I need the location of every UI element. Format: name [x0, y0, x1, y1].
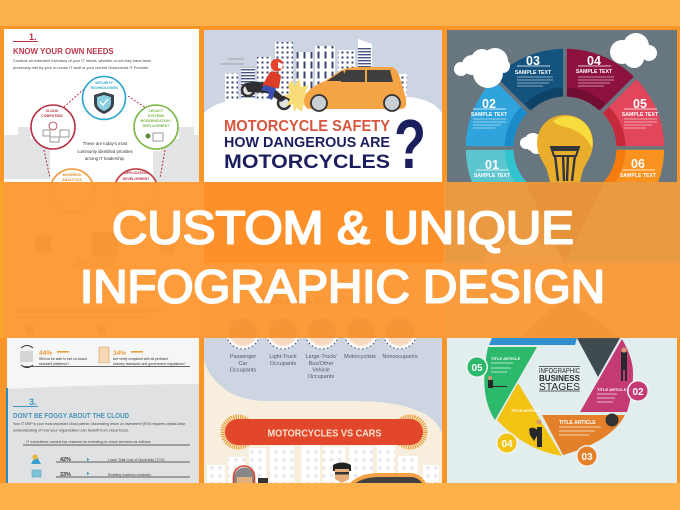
question mark: ?	[394, 105, 426, 183]
stat: 44 percent: stranded platforms?	[39, 362, 69, 366]
driver and car	[333, 462, 426, 483]
body text: understanding of how your organization can benefit from cloud focus.	[13, 428, 129, 432]
segment: pink	[580, 339, 633, 412]
panel: motorcycles vs cars	[204, 338, 442, 483]
intro text	[13, 60, 151, 70]
segment: yellow	[497, 383, 562, 456]
node: legacy systems	[134, 105, 178, 149]
stat: 34 percent: Are verify compliant with all pertinent	[113, 357, 168, 361]
row: 33 percent: Enabling business continuity	[108, 473, 151, 477]
segment labels: 01	[485, 158, 499, 172]
crash burst	[284, 78, 309, 112]
segment 05	[600, 77, 666, 148]
center text: These are today's most	[83, 141, 128, 146]
center text: among IT leadership.	[85, 156, 125, 161]
segment labels: SAMPLE TEXT	[515, 70, 552, 76]
segment labels: SAMPLE TEXT	[474, 173, 511, 179]
title: STAGES	[539, 381, 580, 393]
title text: MOTORCYCLE SAFETY	[224, 118, 390, 135]
segment 01	[466, 150, 515, 182]
panel: six step lightbulb	[447, 30, 677, 182]
title text: MOTORCYCLES	[224, 152, 390, 173]
center text: commonly identified priorities	[77, 149, 133, 154]
light bulb	[537, 115, 593, 182]
segment labels: SAMPLE TEXT	[576, 69, 613, 75]
stat: 34 percent: industry standards and government regulations?	[113, 362, 186, 366]
segment: green	[484, 347, 537, 420]
badge 02: 02	[632, 387, 644, 398]
row: 42 percent: Lower Total Cost of Ownership (TCO)	[108, 458, 164, 462]
heading: DON'T BE FOGGY ABOUT THE CLOUD	[13, 413, 129, 420]
segment: top blue	[489, 338, 577, 345]
stat: 44 percent	[20, 346, 87, 368]
ghost artwork	[15, 169, 620, 346]
person type labels: Passenger	[230, 354, 256, 360]
person type labels: Occupants	[270, 361, 296, 367]
segment labels: SAMPLE TEXT	[471, 112, 508, 118]
node: legacy systems: LEGACY	[149, 109, 164, 113]
panel: business stages wheel	[447, 338, 677, 483]
stat: 44 percent: Will not be able to exit on-board	[39, 357, 87, 361]
rider	[234, 466, 268, 483]
stat: 34 percent: 34%	[113, 350, 126, 357]
segment copy: TITLE ARTICLE	[491, 356, 521, 361]
banner	[225, 419, 423, 445]
center text	[77, 141, 133, 161]
intro text: Conduct an extensive inventory of your IT needs, whether or not they have been	[13, 58, 151, 63]
node: cloud computing	[31, 105, 75, 149]
segment copy	[491, 356, 627, 426]
node: legacy systems: REPLACEMENT	[143, 124, 170, 128]
step number: 1.	[29, 32, 37, 42]
row: 33 percent: 33%	[60, 472, 71, 478]
person type labels: Bus/Other	[309, 361, 334, 367]
node: security technologies	[82, 76, 126, 120]
segment labels: 06	[631, 157, 645, 171]
stat: 44 percent: 44%	[39, 350, 52, 357]
clouds	[454, 33, 657, 154]
segment 02	[466, 84, 527, 150]
segment rules and copy lines	[473, 66, 657, 170]
node: security technologies: SECURITY	[95, 81, 114, 85]
title text: HOW DANGEROUS ARE	[224, 135, 390, 151]
banner: MOTORCYCLES VS CARS	[268, 428, 382, 440]
body text	[13, 422, 186, 432]
ghost artwork: FATALITIES BY PERSON TYPE	[253, 295, 407, 307]
node: legacy systems: MODERNIZATION /	[140, 119, 172, 123]
person type labels	[230, 354, 418, 380]
node: business analytics	[51, 168, 93, 182]
segment: dark grey	[577, 338, 620, 377]
segments	[466, 48, 664, 182]
badge 05: 05	[471, 363, 483, 374]
motorcycle and rider	[242, 59, 290, 109]
step number: 3.	[29, 397, 37, 407]
city skyline	[220, 39, 407, 105]
segment copy: TITLE ARTICLE	[559, 420, 596, 426]
step number	[13, 397, 38, 407]
node: legacy systems: SYSTEMS	[148, 114, 165, 118]
title	[539, 366, 581, 393]
heading: KNOW YOUR OWN NEEDS	[13, 47, 114, 56]
segment labels: 02	[482, 97, 496, 111]
stat: 34 percent	[99, 347, 186, 366]
person type labels: Large-Truck/	[306, 354, 337, 360]
pale city	[207, 445, 439, 483]
segment labels: SAMPLE TEXT	[622, 112, 659, 118]
node: application development: APPLICATION	[124, 171, 148, 175]
person type labels: Occupants	[230, 368, 256, 374]
badge 02	[627, 380, 649, 402]
orange car	[304, 67, 406, 111]
row: 42 percent: 42%	[60, 457, 71, 463]
row: 33 percent	[32, 470, 190, 478]
title: BUSINESS	[539, 374, 581, 383]
segment copy: TITLE ARTICLE	[511, 408, 541, 413]
segment 03	[498, 48, 564, 112]
badge 04	[496, 432, 518, 454]
orange title band	[0, 169, 680, 346]
figures	[488, 347, 627, 447]
person type labels: Motorcyclists	[344, 354, 376, 360]
badge 05	[466, 356, 488, 378]
title text	[224, 120, 390, 168]
laurel bursts	[223, 417, 425, 447]
segment 04	[565, 47, 636, 113]
panel: motorcycle safety	[204, 30, 442, 183]
person type labels: Nonoccupants	[382, 354, 418, 360]
person type labels: Car	[239, 361, 248, 367]
panel: know your own needs	[4, 29, 199, 182]
row: 42 percent	[31, 454, 190, 464]
node: security technologies: TECHNOLOGIES	[90, 86, 119, 90]
segment labels: SAMPLE TEXT	[620, 173, 657, 179]
segment copy: TITLE ARTICLE	[597, 387, 627, 392]
segment 06	[612, 146, 664, 182]
badge 03: 03	[581, 452, 593, 463]
person type labels: Vehicle	[312, 368, 330, 374]
intro text: previously met by your in-house IT staff or your current Outsourced IT Provider.	[13, 65, 149, 70]
node: business analytics: BUSINESS	[63, 173, 82, 177]
node: cloud computing: CLOUD	[46, 109, 59, 113]
segment labels: 03	[526, 54, 540, 68]
panel: cloud statistics	[6, 338, 199, 483]
node: application development: DEVELOPMENT	[123, 177, 150, 181]
node: business analytics: ANALYTICS	[62, 178, 83, 182]
person type labels: Occupants	[308, 374, 334, 380]
segment labels: 05	[633, 97, 647, 111]
segment labels: 04	[587, 54, 601, 68]
badge 03	[576, 445, 598, 467]
person type circles	[227, 338, 416, 350]
node: cloud computing: COMPUTING	[41, 114, 63, 118]
band headline: CUSTOM & UNIQUE	[112, 202, 574, 254]
band headline	[80, 202, 605, 312]
badge 04: 04	[501, 439, 513, 450]
band headline: INFOGRAPHIC DESIGN	[80, 260, 605, 312]
subheading: IT executives named top reasons for investing in cloud services as follows:	[26, 440, 151, 444]
segment inner bands	[509, 92, 621, 186]
step number	[13, 34, 38, 42]
title: INFOGRAPHIC	[539, 368, 580, 375]
body text: Your IT MSP is your most important cloud partner. Maximizing return on investment (ROI) requires crystal-clear	[13, 422, 186, 426]
node: application development	[115, 168, 157, 182]
white hill	[204, 97, 442, 182]
segment labels	[471, 54, 659, 179]
segment: orange	[542, 415, 625, 455]
person type labels: Light-Truck	[269, 354, 297, 360]
